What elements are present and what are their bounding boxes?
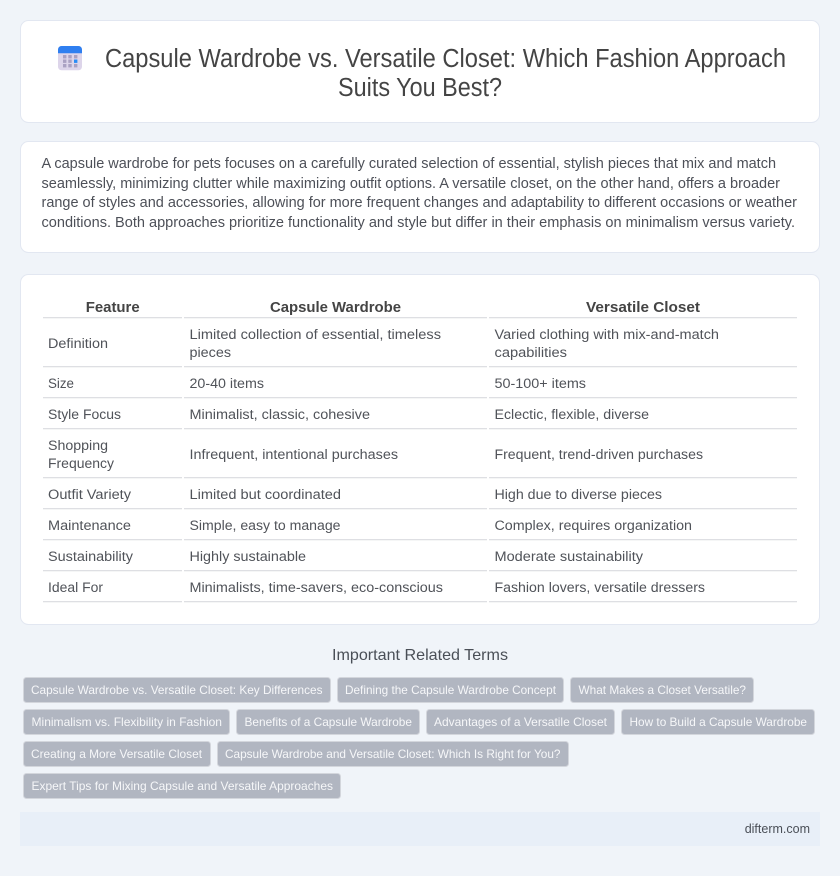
table row: maintenance: Simple, easy to manage (190, 518, 341, 534)
table header row: Capsule Wardrobe (270, 299, 401, 316)
tag: what makes a closet versatile (570, 678, 754, 702)
table row: style focus: Eclectic, flexible, diverse (494, 407, 649, 423)
tag: key differences (24, 678, 330, 702)
tag: which is right for you (218, 742, 568, 766)
table row: style focus: Style Focus (48, 407, 121, 423)
table row: ideal for: Minimalists, time-savers, eco-conscious (190, 580, 443, 596)
table row: definition: Definition (48, 336, 108, 352)
text block: introduction: range of styles and accessories, allowing for more frequent changes and adaptability to different occasions or weather (42, 195, 797, 211)
table row: sustainability: Moderate sustainability (494, 549, 644, 565)
table row: size: Size (48, 376, 74, 392)
tag: defining the concept: Defining the Capsule Wardrobe Concept (345, 683, 557, 697)
text block: introduction: seamlessly, minimizing clutter while maximizing outfit options. A versatile closet, on the other hand, offers a broader (42, 176, 780, 192)
table row: shopping frequency: Frequency (48, 456, 115, 472)
icon: calendar (58, 46, 82, 70)
tag: expert tips: Expert Tips for Mixing Capsule and Versatile Approaches (32, 779, 333, 793)
tag: minimalism vs flexibility (24, 710, 230, 734)
tag: which is right for you: Capsule Wardrobe and Versatile Closet: Which Is Right for You? (225, 747, 561, 761)
heading: important related terms: Important Related Terms (332, 647, 508, 664)
tag: expert tips (24, 774, 340, 798)
panel: introduction paragraph (20, 142, 820, 252)
text block: introduction: conditions. Both approaches prioritize functionality and style but differ in their emphasis on minimalism versus variety. (42, 215, 795, 231)
table row: definition: Varied clothing with mix-and-match (494, 327, 719, 343)
table row: ideal for (48, 580, 705, 596)
table row: size: 50-100+ items (494, 376, 586, 392)
tag: defining the concept (338, 678, 564, 702)
table row: shopping frequency: Infrequent, intentional purchases (190, 447, 398, 463)
footer: difterm.com (745, 821, 810, 836)
table row: definition: capabilities (494, 345, 567, 361)
table row: maintenance: Complex, requires organization (494, 518, 692, 534)
table row: style focus: Minimalist, classic, cohesive (190, 407, 370, 423)
title: Suits You Best? (338, 74, 502, 102)
tag: what makes a closet versatile: What Makes a Closet Versatile? (578, 683, 746, 697)
table row: size (48, 376, 586, 392)
tag: advantages of a versatile closet: Advantages of a Versatile Closet (434, 715, 608, 729)
tag: how to build (622, 710, 814, 734)
tag: advantages of a versatile closet (426, 710, 614, 734)
table row: shopping frequency: Shopping (48, 438, 108, 454)
tag: benefits of a capsule wardrobe (236, 710, 420, 734)
table row: definition (48, 327, 719, 361)
tag: creating a more versatile closet (24, 742, 210, 766)
title: Capsule Wardrobe vs. Versatile Closet: Which Fashion Approach (105, 45, 786, 73)
table header row (86, 299, 700, 316)
table row: maintenance: Maintenance (48, 518, 131, 534)
text block: introduction (42, 156, 797, 231)
table row: outfit variety: High due to diverse pieces (494, 487, 662, 503)
tag: creating a more versatile closet: Creating a More Versatile Closet (31, 747, 203, 761)
related term tags (24, 678, 814, 798)
tag: minimalism vs flexibility: Minimalism vs. Flexibility in Fashion (32, 715, 222, 729)
table row: ideal for: Ideal For (48, 580, 103, 596)
table row: definition: Limited collection of essential, timeless (190, 327, 441, 343)
table row: ideal for: Fashion lovers, versatile dressers (494, 580, 705, 596)
tag: key differences: Capsule Wardrobe vs. Versatile Closet: Key Differences (31, 683, 322, 697)
table row: shopping frequency: Frequent, trend-driven purchases (494, 447, 703, 463)
text block: introduction: A capsule wardrobe for pets focuses on a carefully curated selection of essential, stylish pieces that mix and match (42, 156, 776, 172)
table row: outfit variety: Limited but coordinated (190, 487, 341, 503)
tag: benefits of a capsule wardrobe: Benefits of a Capsule Wardrobe (244, 715, 412, 729)
table row: shopping frequency (48, 438, 703, 472)
table row: maintenance (48, 518, 692, 534)
table row: sustainability (48, 549, 644, 565)
table row: definition: pieces (190, 345, 231, 361)
title (105, 45, 786, 102)
footer (20, 812, 820, 846)
table header row: Feature (86, 299, 140, 316)
table header row: Versatile Closet (586, 299, 700, 316)
table row: outfit variety: Outfit Variety (48, 487, 132, 503)
table row: outfit variety (48, 487, 662, 503)
tag: how to build: How to Build a Capsule Wardrobe (630, 715, 807, 729)
table row: sustainability: Sustainability (48, 549, 134, 565)
table row: style focus (48, 407, 649, 423)
panel: title header (20, 20, 820, 122)
table row: size: 20-40 items (190, 376, 264, 392)
panel: comparison table (20, 274, 820, 624)
table row: sustainability: Highly sustainable (190, 549, 306, 565)
